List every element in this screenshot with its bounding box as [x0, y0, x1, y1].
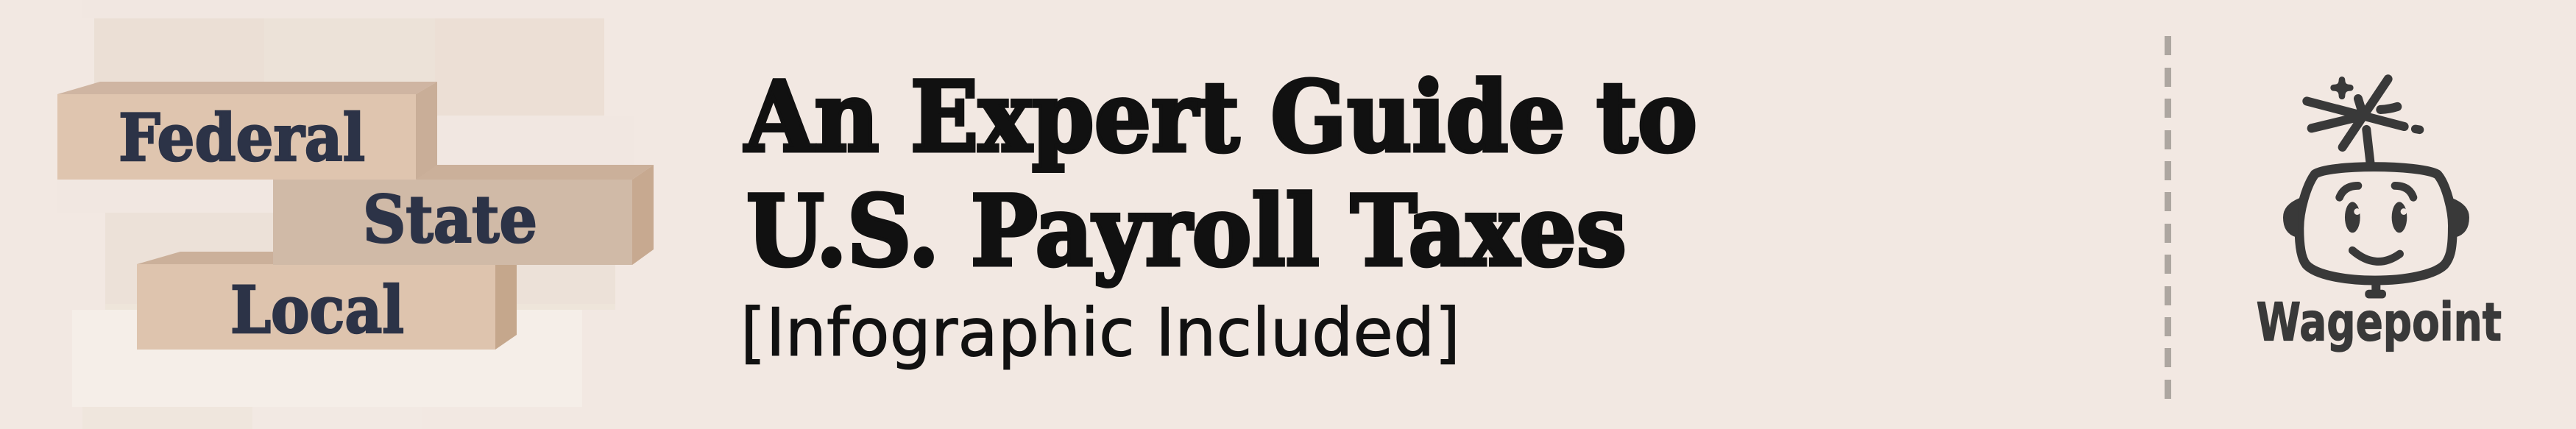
logo: Wagepoint	[2257, 79, 2502, 353]
dashed divider	[2165, 36, 2171, 399]
block: State: State	[363, 181, 537, 258]
block: Federal: Federal	[118, 99, 365, 176]
block: Local: Local	[230, 272, 404, 348]
subtitle: [Infographic Included]	[740, 294, 1460, 372]
block: Federal	[57, 82, 437, 180]
title: U.S. Payroll Taxes	[746, 174, 1627, 288]
block: Local	[137, 252, 517, 350]
icon: ears, eyes and base	[2283, 198, 2469, 299]
block: State	[273, 165, 654, 265]
icon: eye highlights	[2354, 208, 2407, 215]
title: An Expert Guide to	[743, 60, 1697, 174]
icon: robot mascot	[2299, 79, 2452, 280]
wordmark: Wagepoint	[2257, 291, 2502, 353]
title	[743, 60, 1697, 288]
background brick pattern	[57, 0, 634, 429]
